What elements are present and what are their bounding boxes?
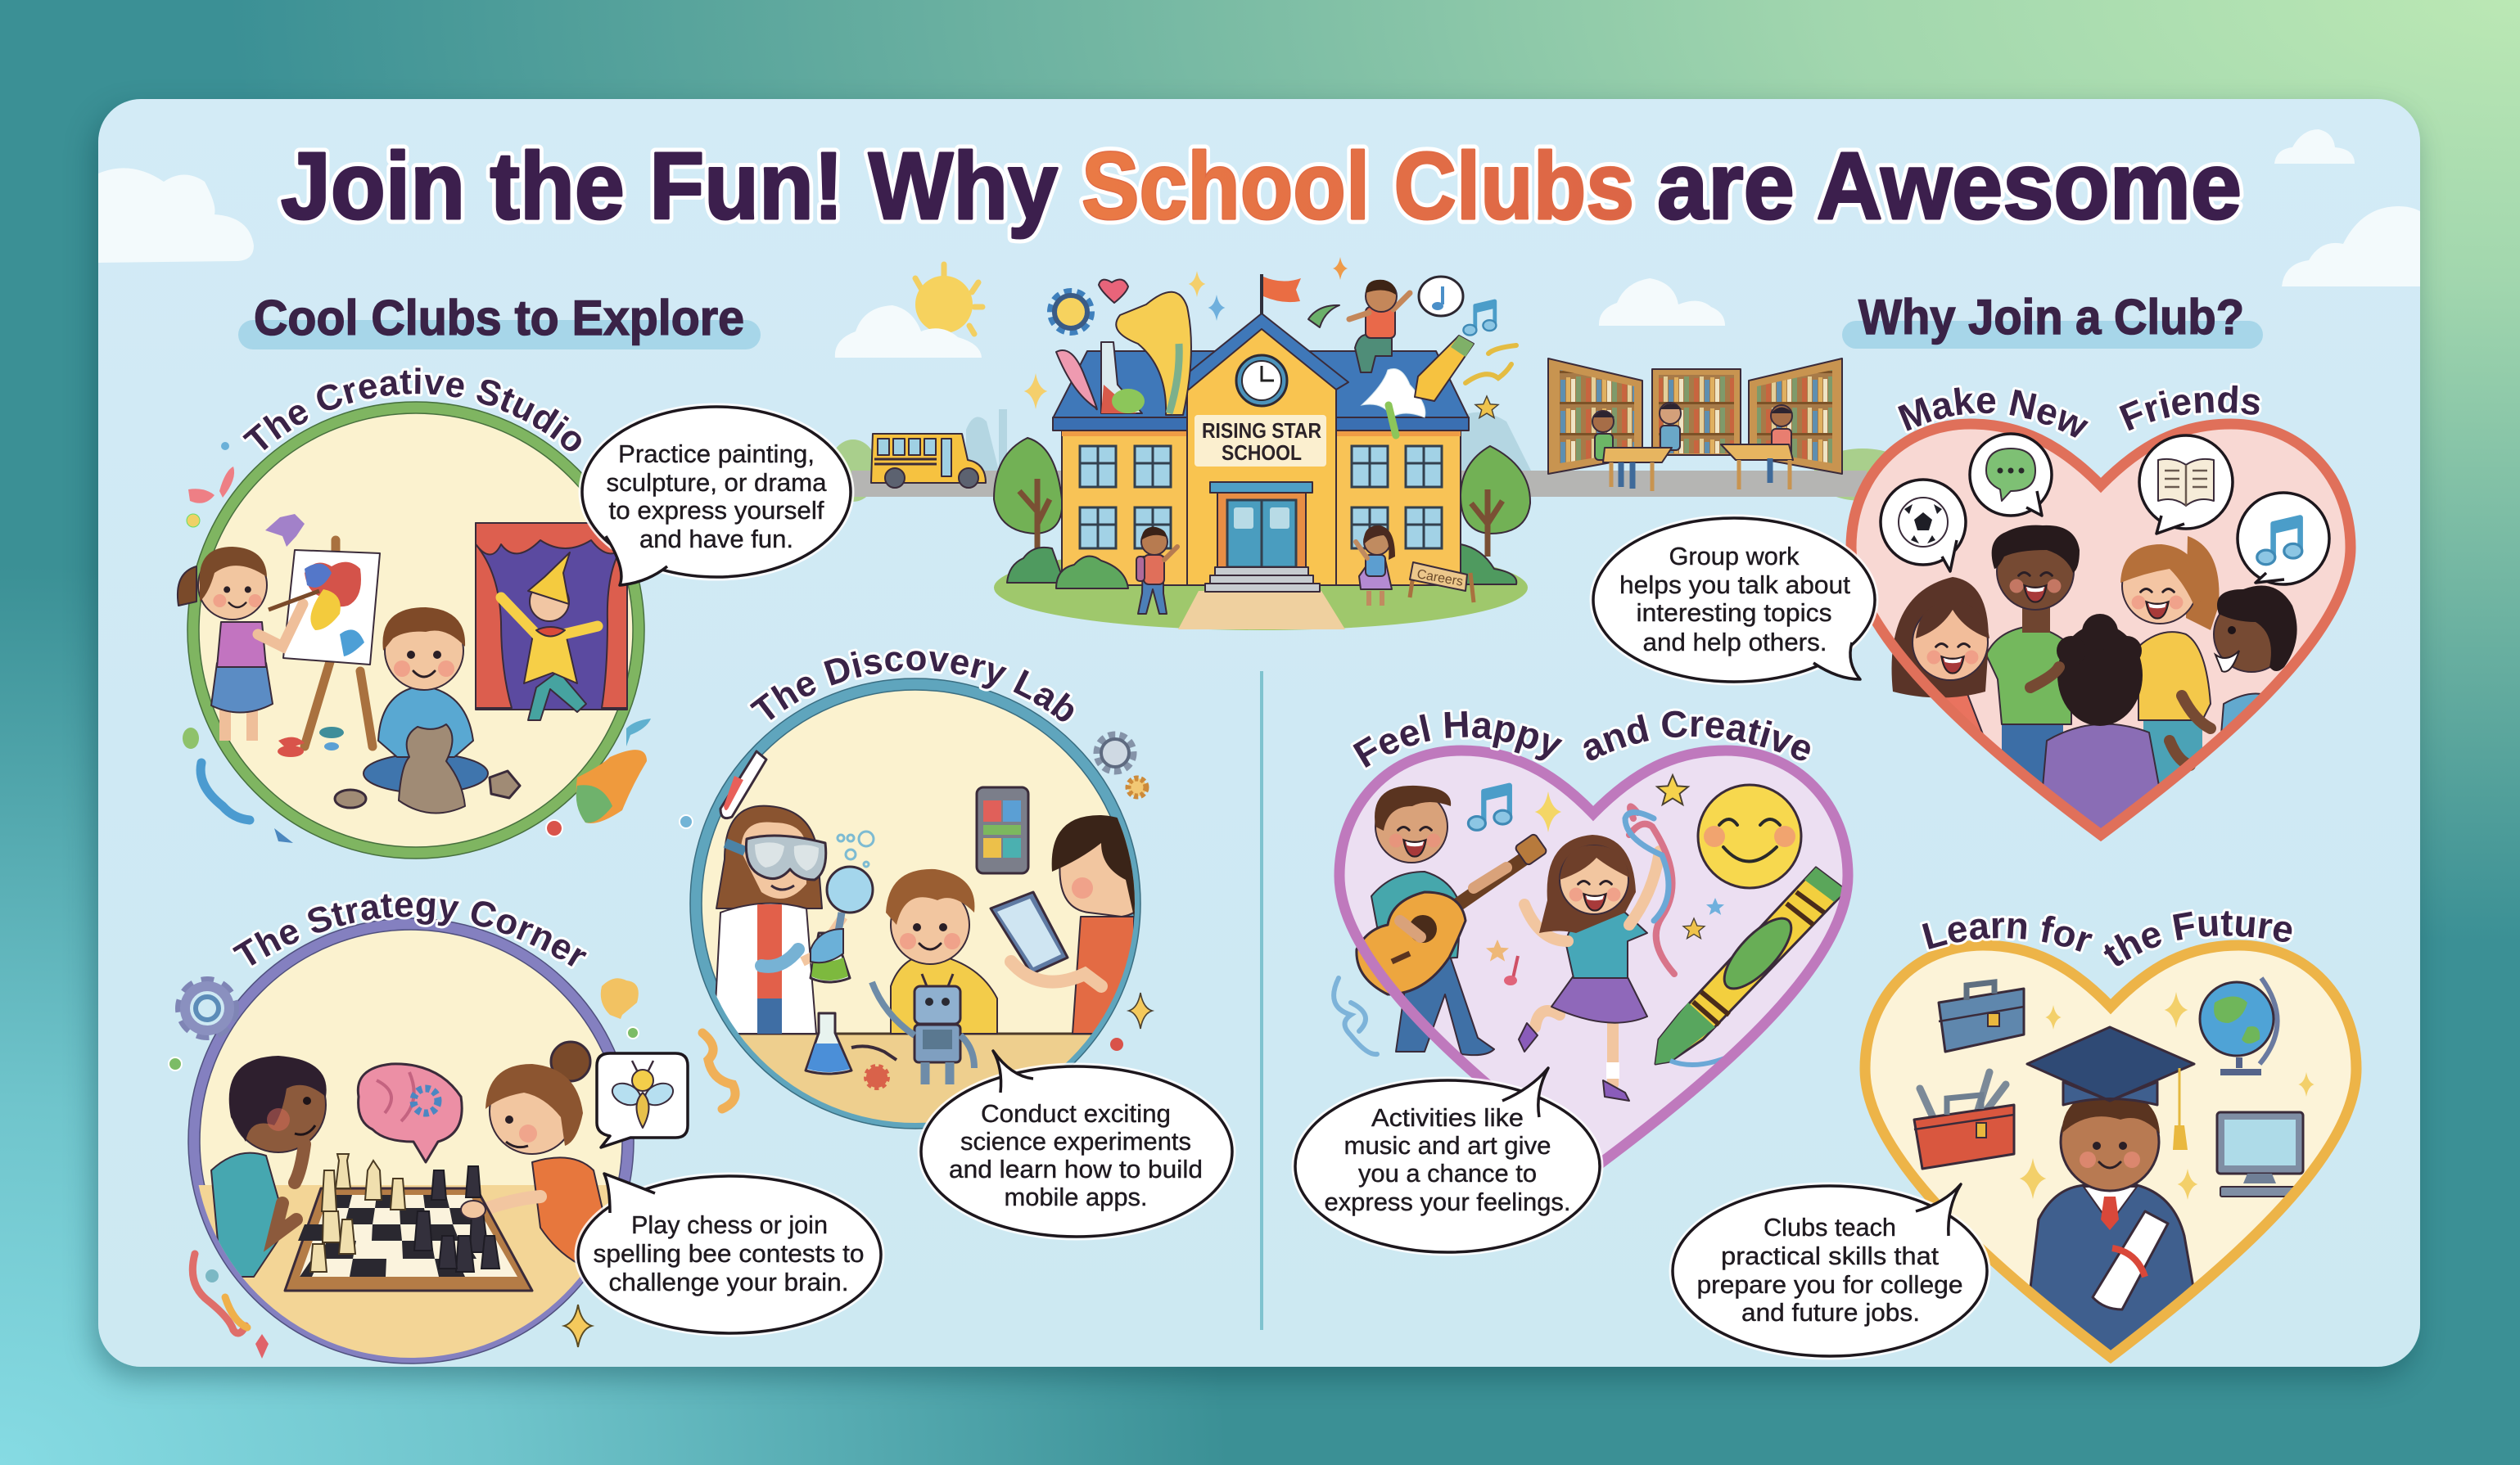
eaves <box>1053 417 1469 430</box>
notes and stars <box>1468 786 1511 830</box>
curved label: Learn for the Future: the Future <box>2101 908 2294 969</box>
stage <box>476 523 627 710</box>
callout: feel happy: Activities like <box>1371 1103 1524 1132</box>
cloud: above library <box>1599 278 1725 326</box>
curved label: Learn for the Future: Learn for <box>1919 913 2095 954</box>
ground <box>994 545 1528 630</box>
door <box>1217 493 1306 568</box>
panel: Make New Friends <box>1851 424 2351 843</box>
careers sign: Careers <box>1416 567 1464 589</box>
right boy head <box>2214 586 2297 672</box>
scientist <box>714 806 843 1034</box>
left girl head <box>1892 577 1989 697</box>
steps <box>1205 567 1320 592</box>
sign <box>1195 415 1326 467</box>
kid waving <box>1356 525 1395 606</box>
green boy <box>2002 725 2063 783</box>
chess pieces <box>310 1154 499 1272</box>
divider <box>1260 671 1263 1330</box>
callout: strategy corner: spelling bee contests to <box>593 1239 865 1268</box>
boy with clay <box>335 607 520 814</box>
callout: strategy corner: challenge your brain. <box>609 1268 848 1296</box>
boy with guitar <box>1371 786 1494 1055</box>
back boy <box>2042 723 2160 828</box>
icon bubble: music <box>2238 493 2329 584</box>
cloud: top left <box>98 168 254 263</box>
performer <box>501 552 598 720</box>
left boy <box>229 1056 327 1236</box>
windows <box>1080 446 1442 548</box>
left girl <box>1945 696 1984 733</box>
illustration: school building: SCHOOL <box>1222 440 1302 465</box>
smiley <box>1698 785 1801 888</box>
clock <box>1236 355 1287 406</box>
illustration: school building: RISING STAR <box>1202 418 1321 443</box>
callout: discovery lab: and learn how to build <box>949 1155 1203 1183</box>
monitor <box>2217 1112 2303 1197</box>
curved label: The Strategy Corner: The Strategy Corner <box>229 892 589 969</box>
callout: creative studio: to express yourself <box>609 496 824 525</box>
wires <box>851 1046 896 1060</box>
heading: Why Join a Club?: Why Join a Club? <box>1858 290 2244 345</box>
flask green <box>811 929 850 982</box>
chess board <box>285 1188 532 1291</box>
tablet <box>991 892 1101 986</box>
paint spots <box>278 727 344 757</box>
easel <box>305 540 373 746</box>
panel: The Creative Studio <box>178 402 644 859</box>
callout: feel happy <box>1295 1068 1600 1252</box>
toolbox <box>1914 1072 2014 1169</box>
decorations: strategy corner <box>169 978 639 1359</box>
panel: Learn for the Future <box>1865 945 2356 1367</box>
callout: creative studio: Practice painting, <box>618 440 815 468</box>
illustration: school building <box>994 257 1530 630</box>
title: are Awesome <box>1657 133 2242 239</box>
curved label: The Discovery Lab: The Discovery Lab <box>747 648 1076 723</box>
callout: discovery lab <box>921 1051 1232 1237</box>
callout: feel happy: you a chance to <box>1358 1159 1537 1188</box>
icon bubble: chat <box>1970 434 2052 516</box>
dancing girl <box>1519 835 1660 1101</box>
bee bubble <box>597 1053 688 1147</box>
decorations: creative studio <box>183 442 651 843</box>
yellow girl head <box>2120 536 2220 630</box>
globe <box>2200 978 2278 1072</box>
table <box>738 1034 1092 1123</box>
ribbons <box>1465 345 1516 383</box>
canvas <box>283 550 380 665</box>
curved label: Make New Friends: Make New <box>1895 385 2091 440</box>
bubbles <box>838 832 874 867</box>
readers <box>1592 411 1614 432</box>
callout: creative studio <box>582 407 851 585</box>
title: School Clubs <box>1082 133 1634 239</box>
panel: The Strategy Corner <box>180 918 688 1365</box>
gear icon <box>1051 292 1091 331</box>
right boy <box>1051 815 1135 1035</box>
red gear <box>866 1066 887 1088</box>
icon: sun and cloud <box>835 264 982 358</box>
curved label: The Creative Studio: The Creative Studio <box>240 365 584 453</box>
curved label: Feel Happy and Creative: Feel Happy <box>1350 709 1565 770</box>
callout: make new friends: Group work <box>1669 542 1800 570</box>
trees <box>994 438 1062 534</box>
flask <box>1101 342 1142 413</box>
music note <box>1463 301 1496 336</box>
kid with backpack <box>1136 527 1177 614</box>
road and skyline <box>829 409 1912 502</box>
crayon <box>1655 868 1846 1064</box>
yellow girl <box>2143 721 2202 783</box>
callout: strategy corner: Play chess or join <box>631 1210 828 1239</box>
sparkles <box>1189 271 1205 297</box>
curved label: Feel Happy and Creative: and Creative <box>1582 709 1813 763</box>
graduate <box>2029 1185 2196 1367</box>
guitar <box>1357 833 1547 994</box>
flag <box>1260 274 1263 314</box>
pencil <box>1415 336 1474 401</box>
careers sign <box>1410 562 1474 602</box>
heart outline <box>1339 751 1848 1169</box>
sparkles <box>2020 992 2315 1200</box>
illustration: library <box>1548 358 1842 491</box>
bushes <box>1007 548 1064 583</box>
swirl <box>1334 978 1377 1054</box>
beaker blue <box>806 1013 851 1074</box>
callout: discovery lab: science experiments <box>960 1127 1191 1156</box>
curved label: Make New Friends: Friends <box>2116 383 2262 434</box>
callout: discovery lab: Conduct exciting <box>981 1099 1171 1128</box>
callout: make new friends: interesting topics <box>1636 598 1832 627</box>
callout: strategy corner <box>578 1174 881 1333</box>
panel: main card <box>98 99 2420 1367</box>
paint swirl <box>1116 292 1191 415</box>
title: are Awesome <box>1657 133 2242 239</box>
decorations: discovery lab <box>680 736 1152 1109</box>
panel: Feel Happy and Creative <box>1334 751 1848 1169</box>
cloud: right edge <box>2282 206 2420 286</box>
diploma <box>2093 1211 2168 1309</box>
curved label: Make New Friends <box>1895 383 2262 440</box>
curved label: Learn for the Future <box>1919 908 2294 969</box>
phone <box>977 787 1028 873</box>
goggles <box>725 836 826 890</box>
icon bubble: book <box>2139 435 2233 534</box>
callout: learn for the future: Clubs teach <box>1764 1213 1896 1242</box>
roof <box>1053 351 1469 418</box>
callout: make new friends <box>1593 518 1875 682</box>
pink palette <box>1056 350 1097 409</box>
right girl <box>479 1042 612 1264</box>
cloud: top right small <box>2274 129 2355 164</box>
hands <box>2030 667 2211 765</box>
heart outline <box>1851 424 2351 835</box>
callout: learn for the future: and future jobs. <box>1741 1298 1920 1327</box>
ribbon <box>1629 806 1674 974</box>
green boy head <box>1992 525 2080 633</box>
heading: Cool Clubs to Explore: Cool Clubs to Explore <box>254 291 744 345</box>
title: Join the Fun! Why <box>281 133 1058 239</box>
callout: learn for the future: prepare you for college <box>1696 1270 1963 1299</box>
wings <box>1062 430 1187 585</box>
right boy <box>2220 692 2260 732</box>
callout: learn for the future <box>1673 1184 1987 1356</box>
callout: make new friends: helps you talk about <box>1619 570 1850 599</box>
hand <box>461 1201 485 1219</box>
left boy body <box>211 1153 287 1277</box>
icon: school bus <box>871 434 986 488</box>
heart outline <box>1865 945 2356 1357</box>
paint splash <box>1362 368 1425 417</box>
curved label: Feel Happy and Creative <box>1350 709 1813 770</box>
tables <box>1603 448 1672 462</box>
callout: feel happy: express your feelings. <box>1325 1188 1570 1216</box>
icon bubble: soccer <box>1881 480 1966 571</box>
robot <box>872 974 974 1084</box>
panel: The Discovery Lab <box>688 678 1154 1132</box>
girl painting <box>178 547 319 741</box>
title: School Clubs <box>1082 133 1634 239</box>
callout: creative studio: and have fun. <box>639 525 793 553</box>
centre boy <box>886 869 997 1034</box>
centre block and gable <box>1187 313 1336 585</box>
callout: make new friends: and help others. <box>1642 628 1827 656</box>
title <box>281 133 2242 239</box>
back boy head <box>2057 614 2143 726</box>
table <box>198 1185 608 1358</box>
music bubble <box>1419 277 1463 316</box>
callout: discovery lab: mobile apps. <box>1004 1183 1148 1211</box>
briefcase <box>1939 982 2024 1052</box>
brain <box>358 1064 462 1162</box>
graduate head <box>2027 1027 2194 1191</box>
magnifier <box>827 867 873 941</box>
callout: feel happy: music and art give <box>1344 1131 1551 1160</box>
heart icon <box>1099 279 1128 303</box>
callout: creative studio: sculpture, or drama <box>606 468 827 497</box>
boy on roof <box>1349 280 1410 372</box>
callout: learn for the future: practical skills that <box>1721 1242 1939 1270</box>
title: Join the Fun! Why <box>281 133 1058 239</box>
